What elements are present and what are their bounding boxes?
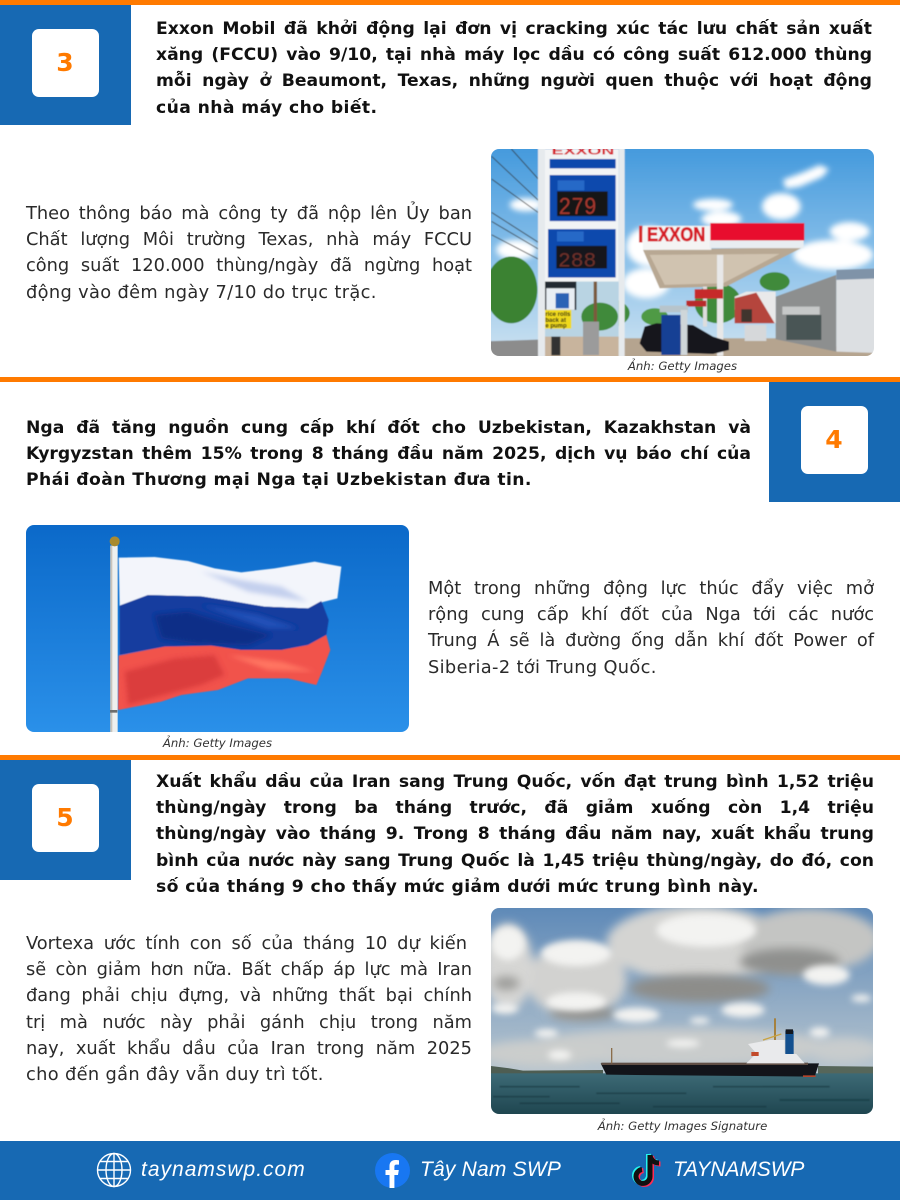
icon: facebook	[375, 1153, 410, 1188]
section 5 body text: cho đến gần đây vẫn duy trì tốt.	[26, 1064, 324, 1085]
section 5 number badge: 5	[56, 803, 74, 832]
section 4 body text: rộng cung cấp khí đốt của Nga tới các nước	[428, 604, 874, 625]
section 5 heading: thùng/ngày trong ba tháng trước, đã giảm xuống còn 1,4 triệu	[156, 798, 874, 818]
photo: Exxon gas station: back at	[545, 318, 566, 324]
footer website text: taynamswp.com	[141, 1158, 306, 1181]
sea	[491, 1073, 873, 1114]
footer facebook text: Tây Nam SWP	[420, 1158, 561, 1181]
section 5 body text: nay, xuất khẩu dầu của Iran trong năm 2025	[26, 1038, 472, 1059]
section 3 number badge: 3	[56, 48, 74, 77]
ship hull	[601, 1063, 819, 1077]
section 3 body text: công suất 120.000 thùng/ngày đã ngừng hoạt	[26, 255, 472, 276]
section 4 body text	[428, 578, 874, 678]
left tree	[485, 257, 537, 323]
photo: Russian flag	[26, 525, 409, 732]
section 3 body text	[26, 201, 472, 303]
footer tiktok text: TAYNAMSWP	[673, 1158, 804, 1181]
footer	[0, 1141, 900, 1200]
photo: Exxon gas station: 288	[558, 251, 596, 274]
section 3 body text: động vào đêm ngày 7/10 do trục trặc.	[26, 282, 377, 303]
building	[776, 275, 836, 352]
section 3 heading: của nhà máy cho biết.	[156, 98, 377, 118]
photo caption 3: Ảnh: Getty Images Signature	[598, 1119, 767, 1133]
section 5 body text	[26, 933, 472, 1085]
photo: Exxon gas station: 279	[558, 195, 597, 222]
section 5 heading	[156, 771, 874, 897]
section 3 heading	[156, 19, 872, 118]
photo: Exxon gas station: e pump	[545, 324, 567, 330]
horizon land	[491, 1066, 603, 1074]
section 4 number badge	[769, 382, 900, 502]
section 5 number badge	[0, 760, 131, 880]
section 3 body text: Chất lượng Môi trường Texas, nhà máy FCCU	[26, 229, 472, 250]
section 5 body text: trị mà nước này phải gánh chịu trong năm	[26, 1012, 472, 1033]
section 4 heading: Nga đã tăng nguồn cung cấp khí đốt cho Uzbekistan, Kazakhstan và	[26, 418, 751, 438]
section 4 heading: Kyrgyzstan thêm 15% trong 8 tháng đầu năm 2025, dịch vụ báo chí của	[26, 444, 751, 464]
section 3 body text: Theo thông báo mà công ty đã nộp lên Ủy ban	[26, 203, 472, 224]
superstructure	[746, 1040, 805, 1063]
section 5 heading: bình của nước này sang Trung Quốc là 1,45 triệu thùng/ngày, do đó, con	[156, 851, 874, 871]
flagpole	[110, 546, 118, 732]
photo: Exxon gas station	[491, 149, 874, 356]
section 5 heading: số của tháng 9 cho thấy mức giảm dưới mức trung bình này.	[156, 877, 759, 897]
photo caption 2: Ảnh: Getty Images	[163, 736, 272, 750]
photo: oil tanker at sea	[491, 908, 873, 1114]
photo: Exxon gas station: rice rolls	[545, 312, 571, 318]
white cloud tops	[491, 913, 871, 1060]
section 5 body text: Vortexa ước tính con số của tháng 10 dự kiến	[26, 933, 467, 954]
section 4 number badge: 4	[825, 425, 843, 454]
price sign	[544, 149, 619, 283]
icon: globe	[96, 1152, 132, 1188]
section 5 body text: sẽ còn giảm hơn nữa. Bất chấp áp lực mà Iran	[26, 959, 472, 980]
section 4 heading	[26, 418, 751, 490]
section 4 heading: Phái đoàn Thương mại Nga tại Uzbekistan đưa tin.	[26, 470, 532, 490]
section 5 heading: thùng/ngày vào tháng 9. Trong 8 tháng đầu năm nay, xuất khẩu trung	[156, 824, 874, 844]
icon: tiktok	[632, 1154, 660, 1187]
section 3 number badge	[0, 5, 131, 125]
section 3 heading: mỗi ngày ở Beaumont, Texas, những người quen thuộc với hoạt động	[156, 71, 872, 91]
car and pump	[640, 323, 729, 354]
section 3 heading: Exxon Mobil đã khởi động lại đơn vị cracking xúc tác lưu chất sản xuất	[156, 19, 872, 39]
light cloud mass	[480, 905, 880, 1067]
section 5 heading: Xuất khẩu dầu của Iran sang Trung Quốc, vốn đạt trung bình 1,52 triệu	[156, 772, 874, 792]
section 4 body text: Một trong những động lực thúc đẩy việc mở	[428, 578, 874, 599]
section 4 body text: Trung Á sẽ là đường ống dẫn khí đốt Power of	[428, 630, 874, 651]
section 5 body text: đang phải chịu đựng, và những thất bại chính	[26, 985, 472, 1006]
grey cloud undersides	[493, 948, 840, 1021]
section 3 heading: xăng (FCCU) vào 9/10, tại nhà máy lọc dầu có công suất 612.000 thùng	[156, 45, 872, 65]
ground	[480, 337, 620, 367]
flag	[118, 557, 341, 710]
canopy	[643, 247, 803, 288]
gap under sign	[544, 282, 619, 356]
section 4 body text: Siberia-2 tới Trung Quốc.	[428, 657, 657, 678]
photo: Exxon gas station: EXXON	[647, 224, 705, 246]
photo caption 1: Ảnh: Getty Images	[628, 359, 737, 373]
